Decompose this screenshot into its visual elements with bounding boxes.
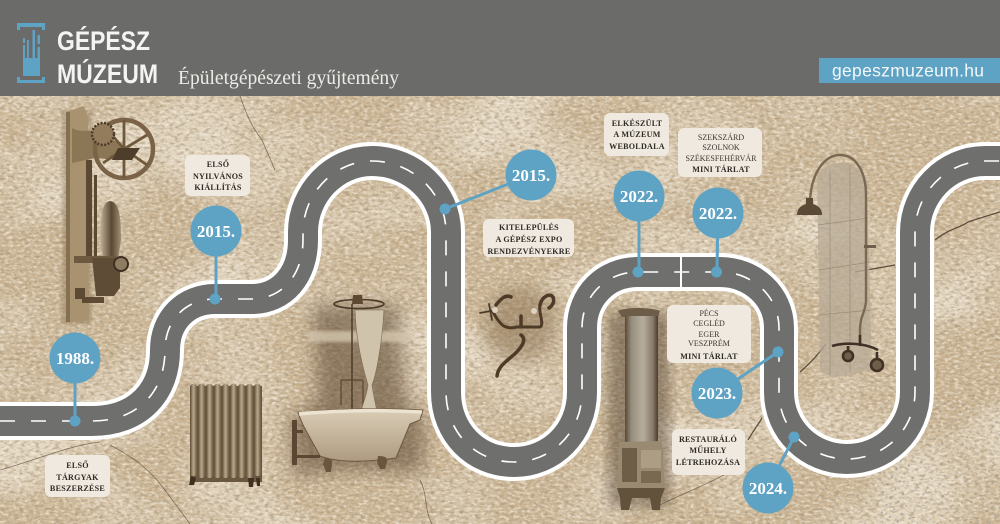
label: restauráló műhely létrehozása [672, 429, 745, 475]
label: első nyilvános kiállítás: NYILVÁNOS [193, 171, 243, 181]
label: pécs cegléd eger veszprém: MINI TÁRLAT [680, 351, 738, 361]
label: pécs cegléd eger veszprém: EGER [699, 330, 720, 339]
label: elkészült a múzeum weboldala: WEBOLDALA [609, 142, 665, 151]
label: restauráló műhely létrehozása: LÉTREHOZÁSA [676, 457, 740, 467]
milestone: 2015 second: 2015. [512, 166, 550, 185]
label: kitelepülés [483, 219, 574, 257]
header bar [0, 0, 1000, 96]
label: szekszárd szolnok székesfehérvár: SZÉKESFEHÉRVÁR [686, 153, 757, 163]
label: pécs cegléd eger veszprém: CEGLÉD [693, 318, 725, 328]
subtitle: Épületgépészeti gyűjtemény [178, 66, 399, 89]
milestone: 2015 first: 2015. [197, 222, 235, 241]
label: kitelepülés: KITELEPÜLÉS [499, 222, 559, 232]
icon: museum logo [17, 23, 45, 83]
milestone: 2022 mini exhibition: 2022. [699, 204, 737, 223]
illustration: bathtub with shower curtain [290, 295, 425, 476]
label: pécs cegléd eger veszprém [667, 305, 751, 363]
label: pécs cegléd eger veszprém: PÉCS [699, 308, 719, 318]
milestone: 2024 [742, 432, 800, 514]
label: pécs cegléd eger veszprém: VESZPRÉM [688, 338, 730, 348]
label: restauráló műhely létrehozása: MŰHELY [689, 445, 727, 455]
label: első nyilvános kiállítás: KIÁLLÍTÁS [194, 182, 242, 192]
road [0, 161, 1000, 462]
milestone: 2023: 2023. [698, 384, 736, 403]
website badge [819, 58, 1000, 83]
label: szekszárd szolnok székesfehérvár: SZEKSZÁRD [698, 132, 744, 142]
label: első tárgyak beszerzése: ELSŐ [66, 460, 89, 470]
milestone: 2023 [692, 346, 784, 418]
milestone: 2024: 2024. [749, 479, 787, 498]
milestone: 2022 website: 2022. [620, 187, 658, 206]
label: elkészült a múzeum weboldala [604, 113, 669, 156]
milestone: 2015 first [190, 206, 242, 304]
label: restauráló műhely létrehozása: RESTAURÁLÓ [679, 434, 737, 444]
label: elkészült a múzeum weboldala: A MÚZEUM [613, 129, 661, 139]
label: első tárgyak beszerzése [45, 455, 110, 497]
label: kitelepülés: RENDEZVÉNYEKRE [487, 246, 571, 256]
label: első nyilvános kiállítás [185, 155, 250, 196]
logo wordmark [57, 25, 158, 89]
label: kitelepülés: A GÉPÉSZ EXPO [495, 234, 563, 244]
milestone: 2015 second [440, 150, 556, 214]
label: első tárgyak beszerzése: BESZERZÉSE [50, 483, 105, 493]
label: szekszárd szolnok székesfehérvár: MINI TÁRLAT [692, 164, 750, 174]
label: szekszárd szolnok székesfehérvár [678, 128, 762, 177]
logo wordmark: GÉPÉSZ [57, 25, 150, 56]
illustration: wall faucet [480, 287, 556, 376]
label: első nyilvános kiállítás: ELSŐ [207, 159, 229, 169]
label: szekszárd szolnok székesfehérvár: SZOLNOK [702, 143, 740, 152]
illustration: wall shower [797, 155, 883, 378]
label: elkészült a múzeum weboldala: ELKÉSZÜLT [612, 118, 663, 128]
logo wordmark: MÚZEUM [57, 58, 158, 89]
milestone: 1988 [50, 332, 100, 426]
milestone: 2022 website [614, 170, 664, 278]
label: első tárgyak beszerzése: TÁRGYAK [56, 472, 99, 482]
illustration: wall-mounted pump with flywheel [62, 106, 153, 324]
website badge: gepeszmuzeum.hu [832, 60, 984, 80]
milestone: 2022 mini exhibition [692, 188, 744, 278]
milestone: 1988: 1988. [56, 349, 94, 368]
illustration: cast iron radiator [189, 384, 262, 487]
illustration: water heater stove [608, 308, 670, 510]
